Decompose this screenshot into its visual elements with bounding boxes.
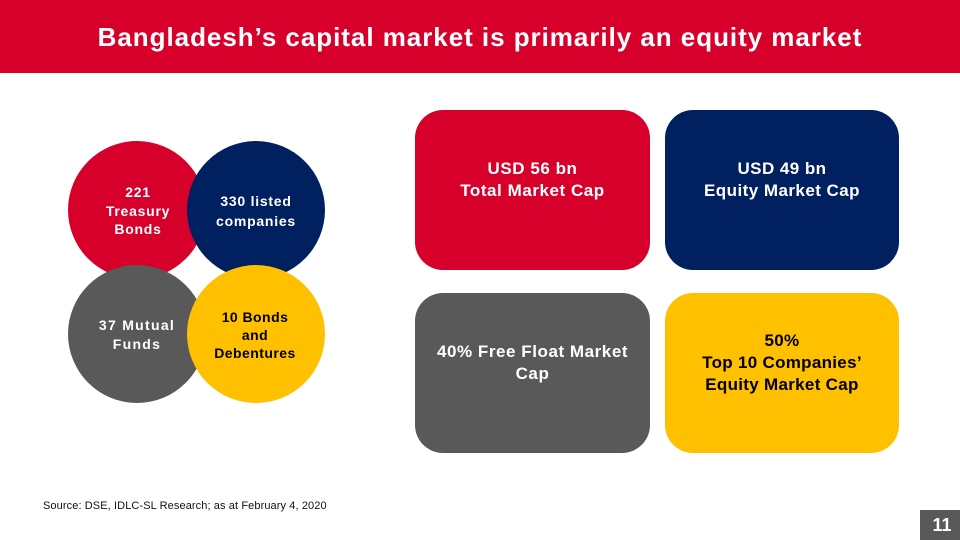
- card: top 10 companies: Top 10 Companies’: [702, 353, 862, 372]
- circle: bonds and debentures: Debentures: [214, 344, 296, 360]
- card: top 10 companies: [665, 293, 899, 453]
- page number: [920, 510, 960, 540]
- card: top 10 companies: 50%: [765, 331, 799, 350]
- card: total market cap: USD 56 bn: [488, 159, 577, 178]
- card: equity market cap: [665, 110, 899, 270]
- card: free float: [415, 293, 650, 453]
- title: Bangladesh’s capital market is primarily an equity market: [98, 22, 862, 52]
- source note: Source: DSE, IDLC-SL Research; as at February 4, 2020: [43, 500, 327, 512]
- card: equity market cap: USD 49 bn: [737, 159, 827, 178]
- circle: listed companies: [187, 141, 325, 279]
- circle: listed companies: 330 listed: [220, 192, 292, 208]
- header band with title: [0, 0, 960, 73]
- circle: mutual funds: 37 Mutual: [99, 317, 175, 333]
- page number: 11: [932, 515, 952, 535]
- card: total market cap: Total Market Cap: [460, 181, 605, 200]
- circle: mutual funds: [68, 265, 206, 403]
- card: free float: Cap: [516, 364, 549, 383]
- card: total market cap: [415, 110, 650, 270]
- card: top 10 companies: Equity Market Cap: [705, 375, 859, 394]
- card: equity market cap: Equity Market Cap: [704, 181, 860, 200]
- circle: treasury bonds: 221: [125, 184, 151, 200]
- card: free float: 40% Free Float Market: [437, 342, 628, 361]
- circle: bonds and debentures: 10 Bonds: [222, 308, 288, 324]
- circle: treasury bonds: Treasury: [106, 202, 170, 218]
- circle: mutual funds: Funds: [113, 336, 161, 352]
- circle: treasury bonds: Bonds: [114, 221, 162, 237]
- circle: bonds and debentures: and: [242, 326, 268, 342]
- circle: treasury bonds: [68, 141, 206, 279]
- circle: bonds and debentures: [187, 265, 325, 403]
- circle: listed companies: companies: [216, 212, 296, 228]
